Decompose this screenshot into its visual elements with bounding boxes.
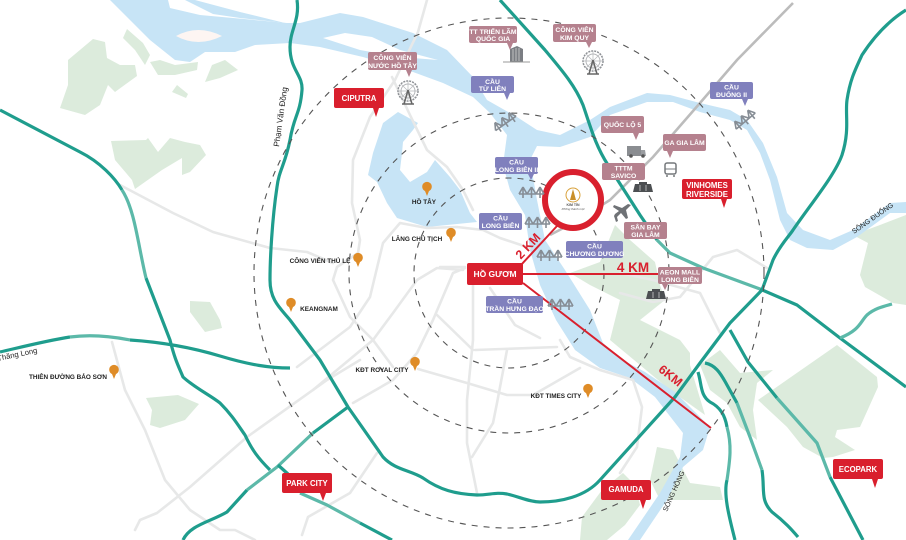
callout: Aeon Mall Long Biên [658, 267, 702, 290]
callout: Cầu Long Biên [479, 212, 522, 230]
callout: Cầu Chương Dương: CHƯƠNG DƯƠNG [565, 251, 624, 258]
callout: Ga Gia Lâm [663, 134, 706, 158]
road and river names: SÔNG HỒNG [660, 469, 687, 513]
pin: Thiên Đường Bảo Sơn [29, 365, 119, 381]
callout: TTTM Savico: TTTM [614, 166, 633, 172]
callout: Gamuda: GAMUDA [608, 485, 644, 494]
callout: Aeon Mall Long Biên: AEON MALL [660, 270, 700, 276]
ferris wheel icons [398, 51, 603, 104]
callout: Cầu Chương Dương: CẦU [587, 240, 602, 250]
callout: Công viên nước Hồ Tây: CÔNG VIÊN [373, 53, 412, 62]
callout: Công viên Kim Quy: CÔNG VIÊN [555, 25, 594, 34]
callout: Aeon Mall Long Biên: LONG BIÊN [661, 275, 699, 284]
callout: Công viên nước Hồ Tây [368, 52, 417, 77]
pin: Lăng Chủ Tịch: LĂNG CHỦ TỊCH [392, 234, 443, 243]
callout: Cầu Trần Hưng Đạo [485, 296, 544, 313]
callout: Công viên nước Hồ Tây: NƯỚC HỒ TÂY [368, 60, 417, 70]
pin: Keangnam: KEANGNAM [300, 306, 338, 313]
callout: Cầu Long Biên II [495, 156, 538, 180]
callout: Sân bay Gia Lâm: GIA LÂM [631, 230, 660, 239]
pin: KĐT Times City: KĐT TIMES CITY [531, 393, 582, 400]
pin: Công viên Thủ Lệ [290, 253, 363, 267]
callout: Công viên Kim Quy [553, 24, 596, 48]
pin: Hồ Tây [412, 182, 437, 206]
icon: plane [613, 204, 631, 222]
callout: Vinhomes Riverside: VINHOMES [686, 181, 728, 190]
callout: TT Triển Lãm Quốc Gia [469, 26, 517, 50]
distance lines: 6KM [656, 362, 685, 389]
callout: Quốc lộ 5: QUỐC LỘ 5 [604, 119, 641, 129]
distance lines: 4 KM [617, 260, 649, 275]
callout: Cầu Đuống II: CẦU [724, 82, 739, 92]
mall icons [633, 182, 666, 299]
road and river names [0, 86, 895, 513]
callout: Ciputra: CIPUTRA [342, 94, 377, 103]
pin: KĐT Times City [531, 384, 593, 400]
distance lines [513, 226, 711, 428]
callout: Cầu Long Biên II: CẦU [509, 156, 524, 166]
pin: KĐT Royal City [356, 357, 420, 374]
callouts [282, 24, 883, 509]
road and river names: Phạm Văn Đồng [272, 86, 289, 147]
callout: Vinhomes Riverside: RIVERSIDE [686, 190, 728, 199]
callout: Cầu Long Biên: LONG BIÊN [482, 221, 519, 230]
callout: Công viên Kim Quy: KIM QUY [560, 35, 590, 42]
callout: Ecopark [833, 459, 883, 488]
project marker: red circle [545, 172, 601, 228]
callout: Cầu Long Biên II: LONG BIÊN II [495, 165, 538, 174]
pin: Công viên Thủ Lệ: CÔNG VIÊN THỦ LỆ [290, 256, 351, 265]
road and river names: SÔNG ĐUỐNG [849, 200, 895, 236]
pin: Hồ Tây: HỒ TÂY [412, 196, 437, 206]
callout: Cầu Đuống II [710, 82, 753, 106]
callout: Cầu Đuống II: ĐUỐNG II [716, 89, 747, 99]
icon: exhibition building [503, 46, 530, 62]
callout: Vinhomes Riverside [682, 179, 732, 208]
icon: truck [627, 146, 646, 158]
callout: Sân bay Gia Lâm: SÂN BAY [631, 222, 661, 232]
pins and place names [29, 182, 593, 400]
pin: Lăng Chủ Tịch [392, 228, 456, 243]
callout: Park City: PARK CITY [286, 479, 329, 488]
callout: TT Triển Lãm Quốc Gia: TT TRIỂN LÃM [469, 27, 517, 36]
callout: Hồ Gươm: HỒ GƯƠM [473, 268, 517, 279]
icon: bus [665, 163, 676, 177]
callout: Ga Gia Lâm: GA GIA LÂM [664, 138, 705, 147]
callout: Hồ Gươm [467, 263, 523, 285]
callout: Ciputra [334, 88, 384, 117]
callout: TTTM Savico [602, 163, 645, 180]
project marker: red circle: KIM TÍN [566, 202, 580, 207]
callout: Cầu Từ Liên: CẦU [485, 76, 500, 86]
callout: Cầu Trần Hưng Đạo: TRẦN HƯNG ĐẠO [485, 303, 544, 313]
callout: Cầu Long Biên: CẦU [493, 212, 508, 222]
callout: Sân bay Gia Lâm [624, 222, 667, 239]
bridge icons [492, 108, 758, 310]
callout: TT Triển Lãm Quốc Gia: QUỐC GIA [476, 33, 510, 43]
callout: Cầu Trần Hưng Đạo: CẦU [507, 296, 522, 306]
callout: Cầu Từ Liên [471, 76, 514, 100]
callout: Park City [282, 473, 332, 501]
callout: Cầu Chương Dương [565, 240, 624, 258]
callout: Gamuda [601, 480, 651, 509]
callout: Ecopark: ECOPARK [839, 465, 878, 474]
pin: Thiên Đường Bảo Sơn: THIÊN ĐƯỜNG BẢO SƠN [29, 372, 107, 381]
pin: Keangnam [286, 298, 338, 313]
callout: Cầu Từ Liên: TỪ LIÊN [479, 84, 506, 93]
distance lines: 2 KM [513, 231, 543, 262]
callout: Quốc lộ 5 [601, 116, 644, 140]
pin: KĐT Royal City: KĐT ROYAL CITY [356, 367, 409, 374]
project marker: red circle: Phồng thành một [562, 207, 585, 211]
callout: TTTM Savico: SAVICO [611, 173, 636, 180]
grey local roads [112, 0, 767, 540]
distance rings [254, 18, 764, 528]
